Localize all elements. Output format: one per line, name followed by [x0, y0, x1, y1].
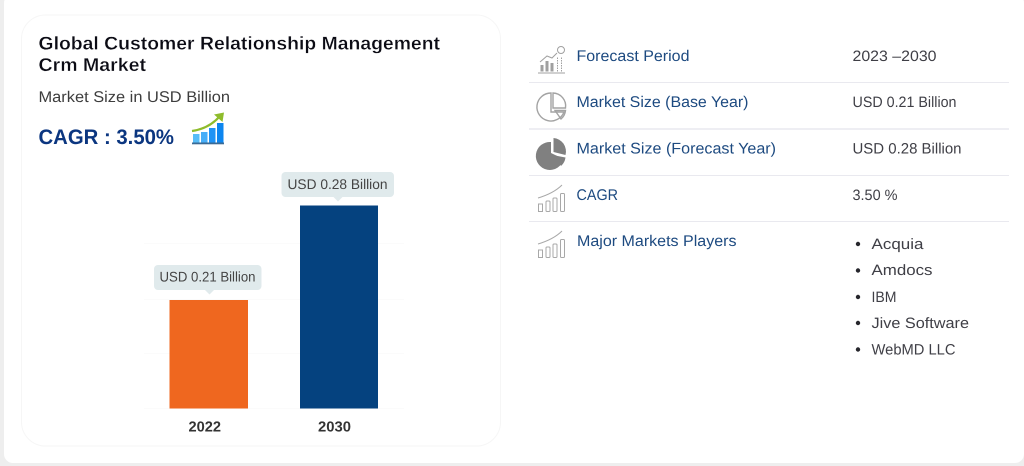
panel: market chart	[22, 15, 500, 446]
row: base year: Market Size (Base Year)	[576, 94, 748, 111]
row: forecast year: Market Size (Forecast Year)	[576, 140, 776, 158]
icon: outline growth bars	[538, 185, 564, 212]
bar chart	[144, 172, 404, 436]
panel: market summary table	[529, 46, 1009, 358]
row: forecast year	[536, 138, 962, 170]
subtitle: Market Size in USD Billion	[38, 89, 230, 106]
list: players: Jive Software	[872, 315, 969, 332]
label: USD 0.28 Billion: USD 0.28 Billion	[288, 176, 388, 192]
icon: solid pie	[536, 138, 566, 170]
label: USD 0.21 Billion	[154, 265, 262, 294]
icon: growth chart	[192, 112, 224, 144]
list: players: IBM	[872, 289, 896, 306]
title	[38, 32, 440, 75]
row: CAGR: CAGR	[576, 187, 618, 204]
row: base year: USD 0.21 Billion	[852, 94, 956, 111]
row: base year	[537, 93, 956, 121]
bar: 2022	[170, 300, 248, 408]
list: players: Amdocs	[872, 262, 932, 279]
title: Global Customer Relationship Management	[38, 32, 440, 54]
row: CAGR	[538, 185, 898, 212]
row: major market players: Major Markets Players	[577, 233, 737, 250]
label: USD 0.21 Billion: USD 0.21 Billion	[160, 268, 256, 284]
icon: forecast chart	[538, 46, 565, 73]
axis label: 2022: 2022	[188, 420, 221, 436]
row: major market players	[538, 231, 969, 358]
row: forecast period: 2023 –2030	[852, 48, 936, 65]
CAGR value: CAGR : 3.50%	[38, 126, 174, 149]
row: CAGR: 3.50 %	[852, 187, 898, 204]
title: Crm Market	[38, 54, 146, 75]
row: forecast year: USD 0.28 Billion	[852, 140, 962, 158]
icon: outline pie	[537, 93, 566, 121]
list: players: WebMD LLC	[872, 342, 956, 358]
row: forecast period	[538, 46, 936, 73]
bar: 2030	[300, 206, 378, 408]
list: players	[856, 236, 969, 358]
label: USD 0.28 Billion	[282, 172, 394, 202]
row: forecast period: Forecast Period	[576, 48, 690, 65]
axis label: 2030: 2030	[318, 420, 351, 436]
icon: outline growth bars	[538, 231, 564, 258]
list: players: Acquia	[872, 236, 924, 253]
